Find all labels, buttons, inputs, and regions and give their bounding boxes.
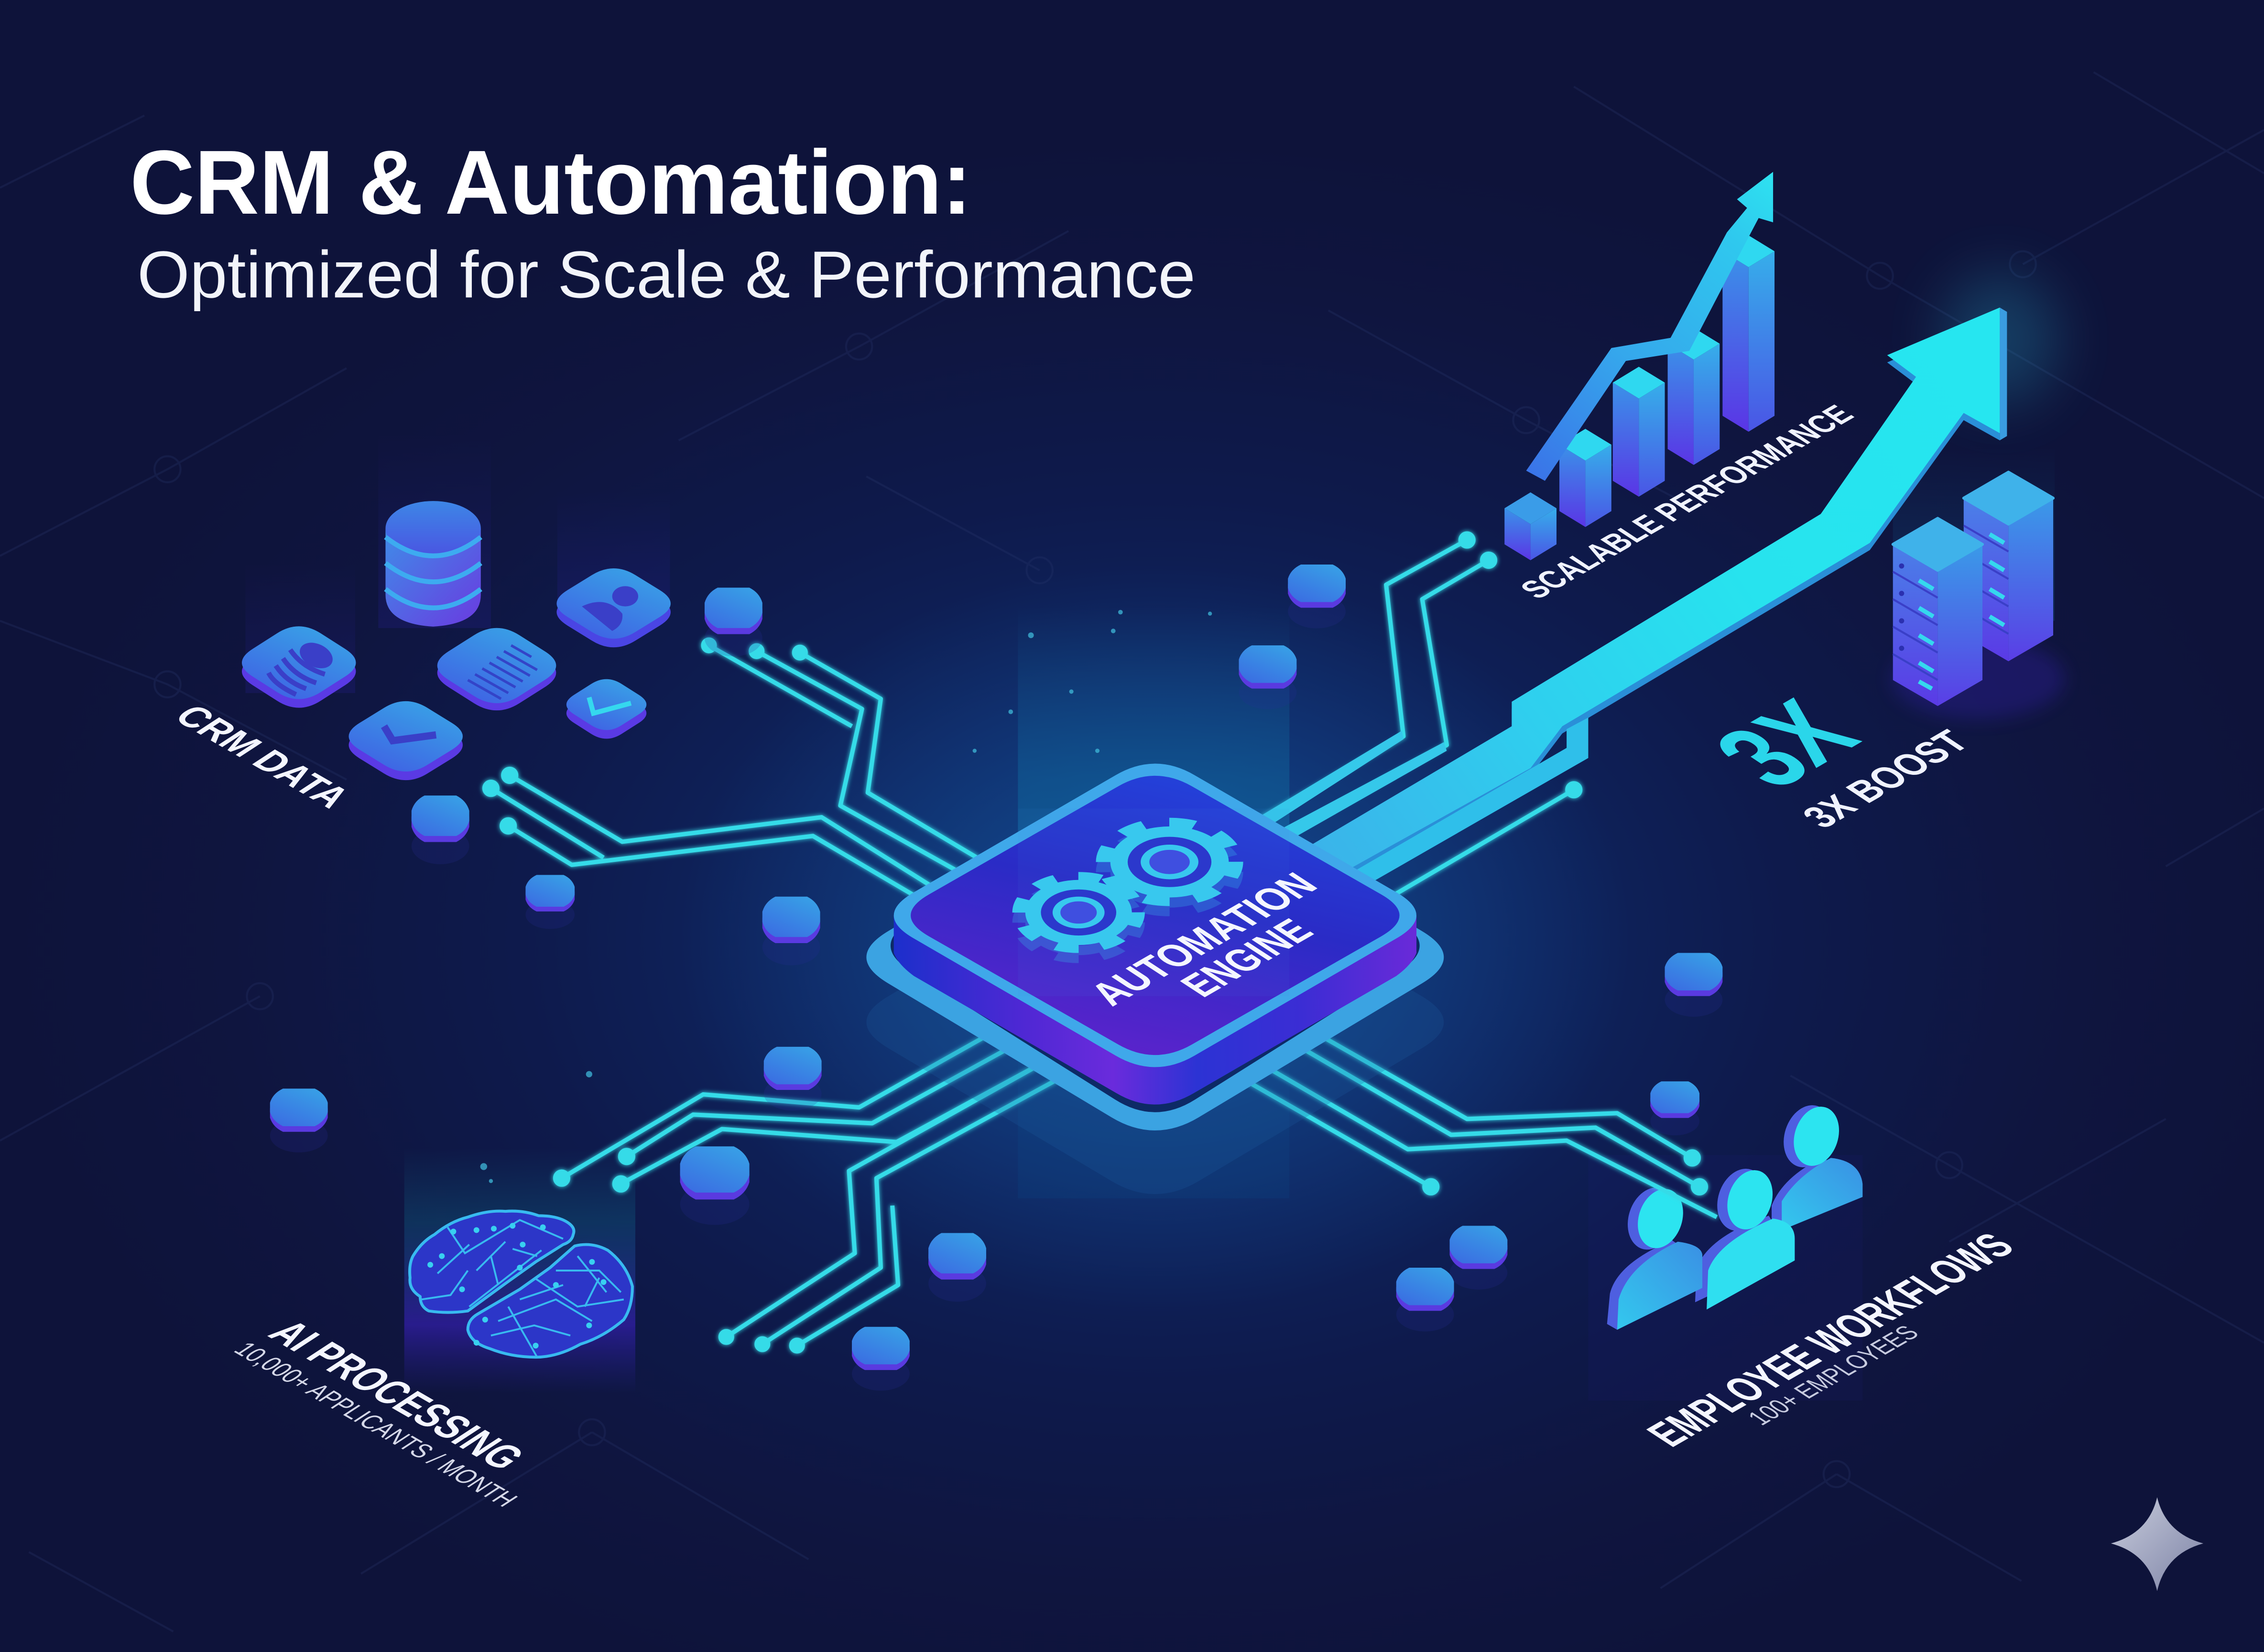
panel: crm data icons xyxy=(242,501,671,780)
trace band beside arrow xyxy=(1343,717,1588,892)
label: ai processing: AI PROCESSING xyxy=(258,1314,535,1477)
bar 2 xyxy=(1559,429,1611,527)
label: applicants per month: 10,000+ APPLICANTS / MONTH xyxy=(228,1338,524,1511)
traces: top left xyxy=(703,640,996,880)
traces: left xyxy=(484,769,946,904)
heading: main title: CRM & Automation: xyxy=(130,132,972,233)
brain lower lobe xyxy=(468,1245,632,1357)
label: 3X boost: 3X BOOST xyxy=(1793,724,1979,835)
icon: person tile xyxy=(556,568,671,647)
icon: servers xyxy=(1892,472,2065,719)
traces: lower right xyxy=(1227,1023,1717,1217)
chip side xyxy=(894,915,1416,1105)
icon: employee front xyxy=(1607,1181,1702,1330)
icon: sparkle watermark xyxy=(2111,1497,2203,1591)
chip base plate xyxy=(866,784,1444,1130)
server left xyxy=(1893,518,1982,706)
chip top border xyxy=(894,764,1416,1067)
decorative particles xyxy=(480,610,1212,1183)
brain upper lobe xyxy=(410,1211,574,1313)
icon: database xyxy=(385,501,481,627)
label: crm data: CRM DATA xyxy=(165,699,360,814)
floating discs xyxy=(270,565,1722,1391)
title xyxy=(130,132,1196,312)
icon: gears xyxy=(1020,823,1234,958)
bar chart: scalable performance xyxy=(1504,172,1774,560)
icon: document tile xyxy=(437,628,556,710)
icon: employee back xyxy=(1772,1099,1862,1234)
icon: employee middle xyxy=(1695,1163,1795,1310)
label: employee workflows: EMPLOYEE WORKFLOWS xyxy=(1636,1226,2025,1454)
server right xyxy=(1964,472,2053,661)
traces: upper right xyxy=(1249,533,1580,904)
bar 4 xyxy=(1668,328,1720,465)
label: automation engine: AUTOMATION xyxy=(1080,866,1328,1012)
big growth arrow xyxy=(1249,274,2057,892)
bar 5 xyxy=(1722,235,1774,432)
icon: employee group xyxy=(1607,1099,1862,1330)
trend line arrow xyxy=(1526,172,1773,481)
chip top face xyxy=(911,776,1400,1055)
label: 3X figure: 3X xyxy=(1687,682,1884,805)
panel: automation engine chip xyxy=(866,764,1444,1194)
label: scalable performance: SCALABLE PERFORMANCE xyxy=(1512,400,1861,604)
traces: lower left xyxy=(555,1022,1083,1351)
bar 3 xyxy=(1613,367,1665,497)
glow columns xyxy=(245,433,2055,1401)
icon: check tile small xyxy=(566,679,646,739)
circuit traces xyxy=(484,533,1717,1351)
label: automation engine: ENGINE xyxy=(1171,913,1323,1003)
label: employees count: 100+ EMPLOYEES xyxy=(1742,1321,1925,1429)
icon: stack tile xyxy=(242,626,356,708)
bar 1 xyxy=(1504,492,1556,560)
icon: check tile large xyxy=(348,701,463,780)
heading: subtitle: Optimized for Scale & Performance xyxy=(137,238,1196,312)
icon: ai brain xyxy=(410,1211,632,1357)
ghost reflection xyxy=(866,850,1444,1194)
